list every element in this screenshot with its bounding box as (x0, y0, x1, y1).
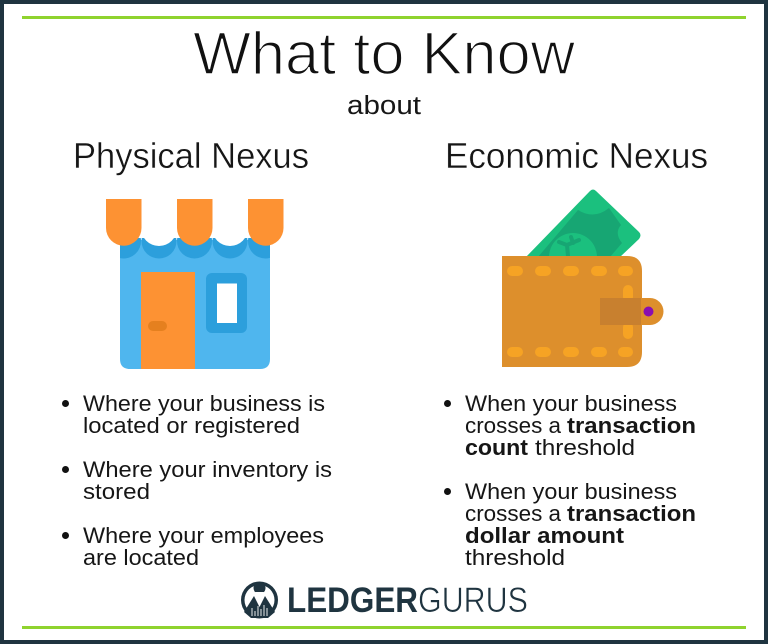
bullet item 2: stored (83, 479, 150, 504)
title: What to Know (193, 20, 576, 87)
icon: wallet with banknote (502, 190, 664, 367)
list: physical nexus (62, 391, 332, 570)
bullet item 2: When your business (465, 479, 677, 504)
bullet item 1 (444, 391, 696, 460)
bullet item 1 (62, 391, 325, 438)
bullet item 2 (444, 479, 696, 570)
bullet item 1: crosses a (465, 413, 561, 438)
bullet item 1: Where your business is (83, 391, 325, 416)
bullet item 2: crosses a (465, 501, 561, 526)
bottom green rule (22, 626, 746, 629)
logo mark (241, 582, 278, 618)
bullet item 2: Where your inventory is (83, 457, 332, 482)
heading: economic nexus: Economic Nexus (445, 135, 708, 176)
logo: LedgerGurus: GURUS (418, 581, 528, 620)
bullet item 3: are located (83, 545, 199, 570)
bullet item 2: transaction (567, 501, 696, 526)
bullet item 3 (62, 523, 324, 570)
bullet item 1: transaction (567, 413, 696, 438)
list: economic nexus (444, 391, 696, 570)
bullet item 2: dollar amount (465, 523, 625, 548)
bullet item 2 (62, 457, 332, 504)
top green rule (22, 16, 746, 19)
bullet item 2: threshold (465, 545, 565, 570)
bullet item 3: Where your employees (83, 523, 324, 548)
logo wordmark: LEDGER (287, 581, 418, 620)
heading: physical nexus: Physical Nexus (73, 135, 309, 176)
icon: storefront (106, 199, 284, 369)
bullet item 1: located or registered (83, 413, 300, 438)
bullet item 1: count (465, 435, 529, 460)
bullet item 1: threshold (535, 435, 635, 460)
logo: LedgerGurus (241, 581, 528, 620)
subtitle: about (347, 92, 421, 120)
bullet item 1: When your business (465, 391, 677, 416)
